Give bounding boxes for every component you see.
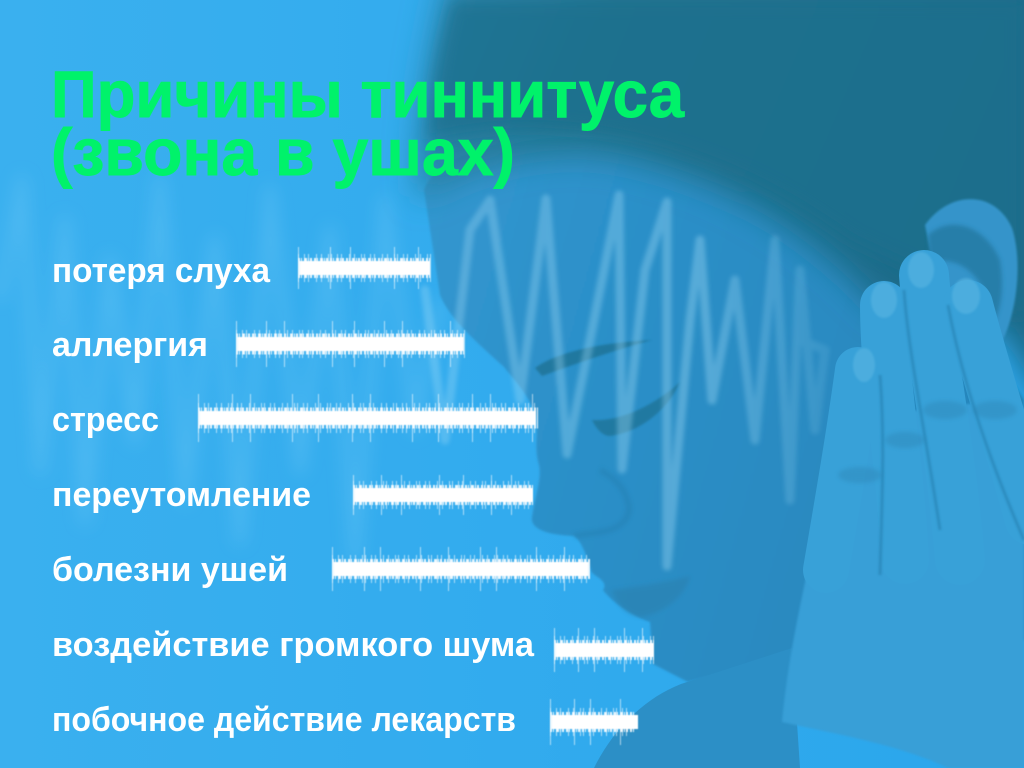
waveform 6 xyxy=(554,628,655,672)
eyebrow xyxy=(535,340,652,376)
waveform 1 xyxy=(298,247,432,289)
sound waveforms xyxy=(198,268,655,722)
waveform 4 xyxy=(353,475,535,515)
cause 7: побочное действие лекарств xyxy=(52,701,516,739)
palm xyxy=(782,400,1024,768)
fingernails xyxy=(853,252,980,382)
overlay sound wave across face xyxy=(425,195,825,566)
list of causes xyxy=(52,252,535,739)
waveform 2 xyxy=(236,321,465,367)
waveform 5 xyxy=(332,547,590,591)
figure: woman holding her ear xyxy=(418,0,1024,768)
shoulder xyxy=(594,648,800,768)
cause 5: болезни ушей xyxy=(52,551,288,589)
knuckle shading xyxy=(838,401,1017,483)
waveform 7 xyxy=(550,699,638,745)
hair top fill xyxy=(428,0,1024,320)
cause 3: стресс xyxy=(52,401,159,439)
title: Причины тиннитуса xyxy=(51,57,685,131)
hand xyxy=(782,252,1024,768)
closed eye lashes xyxy=(592,382,680,436)
cause 4: переутомление xyxy=(52,476,311,514)
waveform 3 xyxy=(198,394,538,442)
title: (звона в ушах) xyxy=(51,115,515,189)
lips xyxy=(612,576,690,617)
face xyxy=(424,138,1024,682)
cause 6: воздействие громкого шума xyxy=(52,626,535,664)
nose shading xyxy=(574,470,629,536)
finger gaps xyxy=(880,290,1024,575)
title xyxy=(51,57,685,189)
ear xyxy=(925,199,1018,345)
blurred background waveform xyxy=(0,180,440,560)
hair xyxy=(418,0,1024,430)
fingers xyxy=(826,275,1024,570)
inner ear xyxy=(928,225,1002,320)
cause 2: аллергия xyxy=(52,326,208,364)
cause 1: потеря слуха xyxy=(52,252,271,290)
